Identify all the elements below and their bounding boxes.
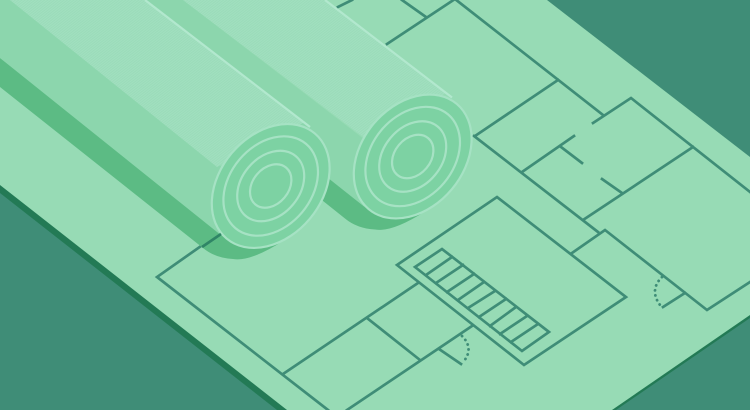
roll back highlight	[325, 0, 452, 98]
roll front highlight	[145, 0, 310, 127]
wall showing through roll shadow	[202, 234, 221, 247]
floor plan walls	[157, 0, 750, 410]
roll front end face	[188, 101, 354, 271]
wall: upper right rooms	[474, 80, 750, 232]
wall: central room	[397, 197, 626, 365]
roll front underside	[0, 58, 283, 259]
roll: back	[122, 0, 496, 242]
door swing: right	[655, 277, 662, 305]
wall: right room	[572, 230, 750, 310]
paper shadow edge	[0, 150, 750, 410]
wall: large left room	[157, 232, 472, 410]
roll back top	[183, 0, 447, 138]
roll back end face	[330, 71, 496, 242]
staircase	[415, 249, 549, 351]
roll front top	[10, 0, 305, 167]
wall: top left fragments	[338, 0, 603, 115]
door swing: lower	[462, 336, 469, 361]
roll: front	[0, 0, 354, 271]
roll back underside	[122, 12, 425, 230]
roll back side	[122, 0, 402, 206]
roll front side	[0, 0, 260, 236]
